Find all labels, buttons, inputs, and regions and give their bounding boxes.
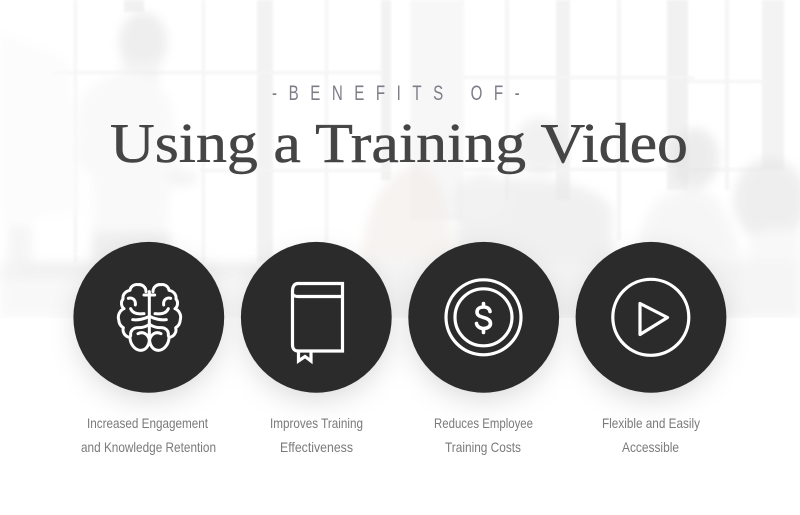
circle 4 bbox=[576, 242, 726, 393]
circle 2 bbox=[241, 242, 392, 393]
label 3: Training Costs bbox=[445, 439, 521, 455]
label 3: Reduces Employee bbox=[434, 415, 533, 431]
label 2: Improves Training bbox=[270, 415, 363, 431]
circle 1 bbox=[73, 242, 224, 393]
audience bbox=[362, 165, 452, 262]
circle 3 bbox=[408, 242, 559, 393]
whiteboard bbox=[0, 30, 82, 226]
icon: brain bbox=[118, 285, 181, 350]
circle shadows bbox=[77, 255, 723, 399]
icon: play bbox=[613, 279, 689, 355]
label 2: Effectiveness bbox=[280, 439, 353, 455]
floor band bbox=[0, 262, 800, 318]
benefit 4: accessible bbox=[576, 242, 726, 455]
icon: coin bbox=[446, 280, 521, 355]
background photo bbox=[0, 0, 800, 318]
heading: benefits of: -BENEFITS OF- bbox=[272, 80, 520, 105]
title: Using a Training Video bbox=[110, 113, 688, 175]
presenter bbox=[119, 12, 167, 61]
benefit 3: costs bbox=[408, 242, 559, 455]
label 4: Flexible and Easily bbox=[602, 415, 700, 431]
benefit 2: effectiveness bbox=[241, 242, 392, 455]
label 4: Accessible bbox=[622, 439, 679, 455]
icon: book bbox=[292, 284, 342, 361]
benefit 1: engagement bbox=[73, 242, 224, 455]
window frames bbox=[54, 0, 784, 262]
label 1: and Knowledge Retention bbox=[81, 439, 216, 455]
label 1: Increased Engagement bbox=[87, 415, 208, 431]
